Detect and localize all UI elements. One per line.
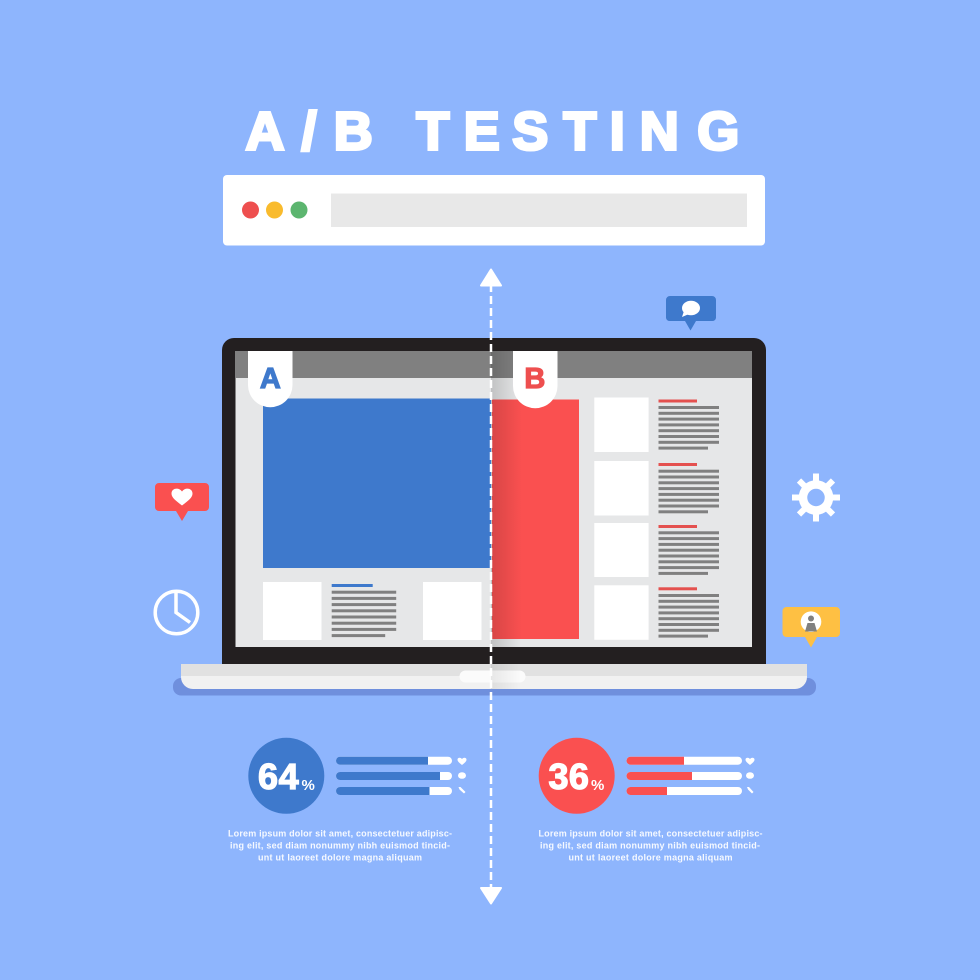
variant A thumbnail 2 bbox=[423, 582, 482, 640]
laptop lid bezel bbox=[222, 338, 766, 664]
description B: Lorem ipsum dolor sit amet, consectetuer adipisc- bbox=[538, 828, 762, 838]
browser address bar bbox=[223, 175, 765, 246]
variant B tab: B bbox=[524, 363, 545, 395]
variant B hero block bbox=[492, 400, 579, 639]
variant B text lines bbox=[658, 400, 719, 638]
laptop base bbox=[181, 664, 807, 689]
variant B page bbox=[491, 351, 719, 647]
title: A/B TESTING bbox=[246, 102, 739, 162]
variant A hero block bbox=[263, 398, 491, 568]
laptop shadow bbox=[173, 678, 816, 696]
icon: comment bubble bbox=[666, 296, 716, 330]
laptop bbox=[181, 338, 807, 689]
icon: user bubble bbox=[782, 607, 840, 648]
description A bbox=[228, 828, 452, 862]
progress bars A bbox=[336, 757, 452, 795]
stat panel: variant A bbox=[228, 738, 466, 862]
icon: pie chart bbox=[155, 591, 198, 634]
description B bbox=[538, 828, 762, 862]
percentage value B: % bbox=[591, 777, 604, 794]
small icons B bbox=[746, 758, 754, 794]
description A: Lorem ipsum dolor sit amet, consectetuer adipisc- bbox=[228, 828, 452, 838]
percentage value A: 64 bbox=[258, 756, 299, 797]
variant B tab bbox=[513, 351, 558, 408]
percentage value B: 36 bbox=[548, 756, 589, 797]
variant A thumbnail 1 bbox=[263, 582, 322, 640]
variant A tab bbox=[248, 351, 292, 407]
description A: ing elit, sed diam nonummy nibh euismod tincid- bbox=[230, 840, 450, 850]
percentage circle B bbox=[539, 738, 615, 814]
double-headed dashed arrow bbox=[481, 270, 501, 904]
base fold shadow bbox=[491, 664, 521, 689]
percentage value A: % bbox=[302, 777, 315, 794]
small icons A bbox=[458, 758, 466, 794]
stat panel: variant B bbox=[538, 738, 762, 862]
variant A text lines bbox=[332, 584, 396, 637]
variant A tab: A bbox=[260, 363, 281, 395]
description B: unt ut laoreet dolore magna aliquam bbox=[568, 852, 732, 862]
description B: ing elit, sed diam nonummy nibh euismod tincid- bbox=[540, 840, 760, 850]
centre fold shadow bbox=[491, 351, 521, 647]
page header strip bbox=[235, 351, 752, 378]
window control dots bbox=[242, 202, 308, 218]
description A: unt ut laoreet dolore magna aliquam bbox=[258, 852, 422, 862]
percentage circle A bbox=[248, 738, 324, 814]
icon: gear bbox=[792, 474, 840, 522]
icon: heart bubble bbox=[155, 483, 209, 521]
laptop screen bbox=[236, 351, 752, 647]
variant A page bbox=[248, 351, 491, 640]
progress bars B bbox=[626, 757, 742, 795]
variant B thumbnails bbox=[594, 398, 649, 640]
address field bbox=[331, 194, 747, 227]
